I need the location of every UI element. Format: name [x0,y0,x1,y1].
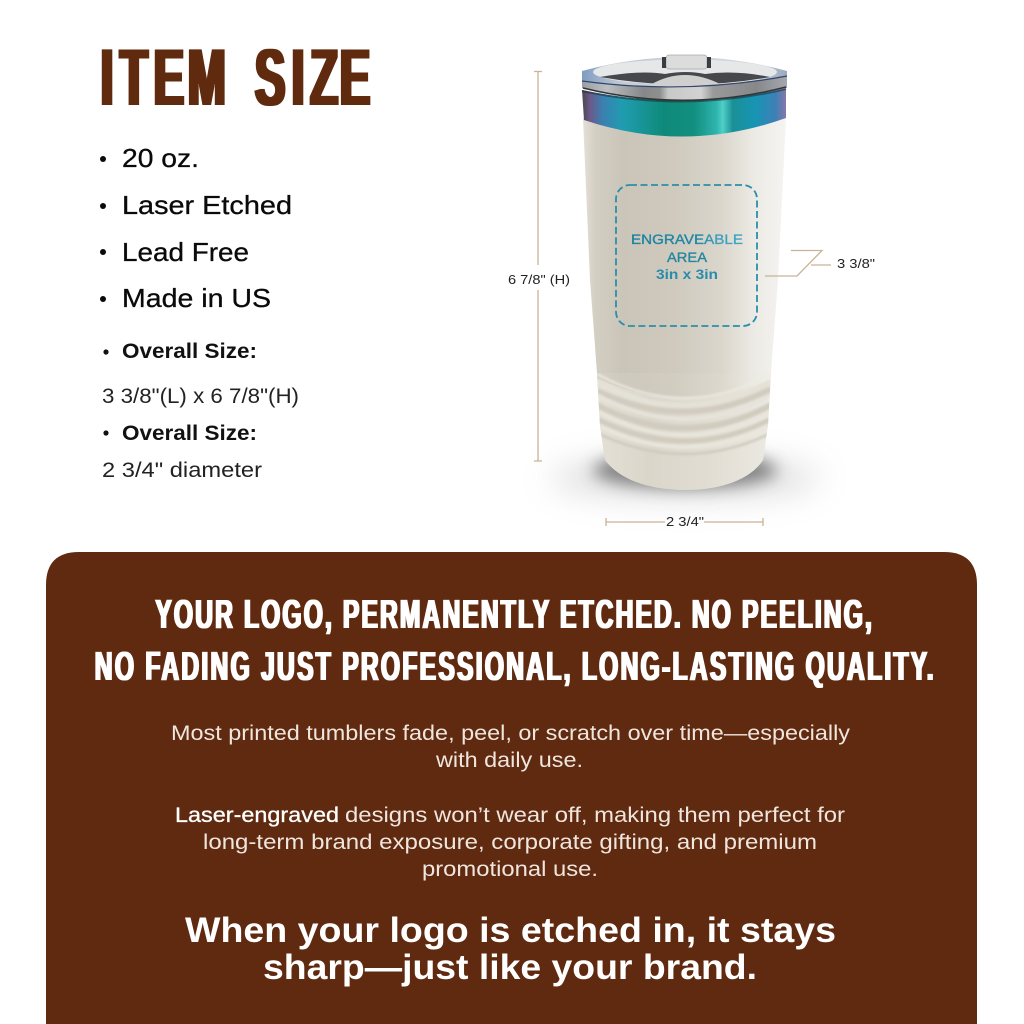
panel paragraph one: with daily use. [435,749,583,772]
panel closing statement [185,911,836,987]
dimension: engraving width callout: 3 3/8" [837,256,875,271]
panel paragraph two: designs won’t wear off, making them perfect for [345,804,845,827]
panel paragraph one: Most printed tumblers fade, peel, or scratch over time—especially [171,722,851,745]
panel paragraph one [171,722,851,772]
panel: permanently etched [46,552,977,1024]
panel paragraph two: promotional use. [422,858,598,881]
panel closing statement: When your logo is etched in, it stays [185,911,836,950]
engravable area [616,185,757,326]
dimension: height: 6 7/8" (H) [508,272,570,287]
panel heading: NO FADING JUST PROFESSIONAL, LONG-LASTING QUALITY. [95,644,934,690]
panel paragraph two: Laser-engraved [175,804,339,827]
dimension: diameter: 2 3/4" [666,514,704,529]
tumbler illustration [550,55,820,498]
lid tab [662,55,711,69]
tumbler body [583,118,786,490]
feature list: Made in US [122,283,271,313]
lid [582,55,787,100]
panel heading [95,592,934,690]
dimension: engraving width callout [765,250,875,276]
panel closing statement: sharp—just like your brand. [263,948,757,987]
dimension: height [508,71,570,461]
engravable area: ENGRAVEABLE [631,231,743,247]
feature list: Laser Etched [122,190,292,220]
panel paragraph two [175,804,845,881]
overall size details: Overall Size: [122,422,257,445]
panel heading: YOUR LOGO, PERMANENTLY ETCHED. NO PEELING, [155,592,872,638]
engravable area: AREA [667,249,708,265]
metallic band [582,88,786,137]
overall size details: Overall Size: [122,340,257,363]
overall size details [102,340,299,482]
feature list: Lead Free [122,237,249,267]
overall size details: 3 3/8"(L) x 6 7/8"(H) [102,385,299,408]
tumbler base rings [597,373,771,490]
ground shadow [550,452,820,498]
panel paragraph two: long-term brand exposure, corporate gifting, and premium [203,831,817,854]
overall size details: 2 3/4" diameter [102,459,262,482]
dimension: diameter [606,514,763,529]
title: item size: ITEM SIZE [101,32,370,122]
engravable area: 3in x 3in [656,266,718,282]
feature list [100,143,292,313]
feature list: 20 oz. [122,143,199,173]
